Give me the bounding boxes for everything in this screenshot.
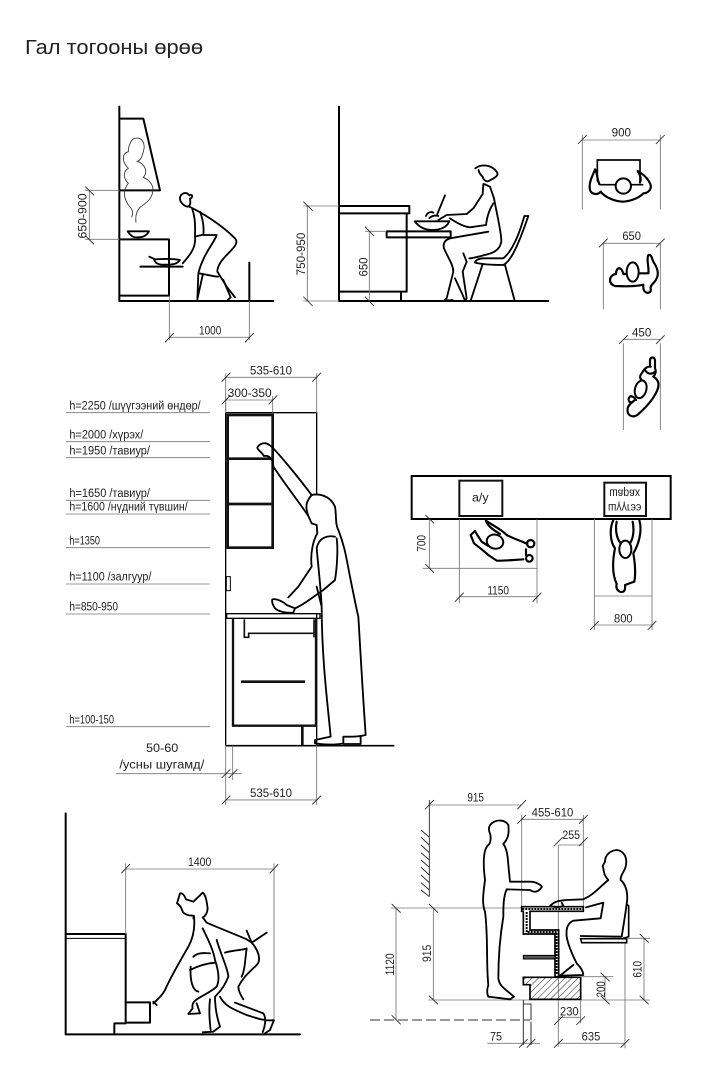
head xyxy=(475,165,498,181)
dimension 1000: 1000 xyxy=(199,323,221,337)
dish xyxy=(149,257,180,265)
counter lower line xyxy=(66,937,126,940)
dimension 535-610 bottom xyxy=(222,786,321,804)
cabinet, hood and floor xyxy=(119,107,273,301)
dashed drain xyxy=(523,1000,531,1045)
dimension 1120 xyxy=(383,904,401,1024)
dimension 200: 200 xyxy=(594,981,608,997)
seated person xyxy=(550,850,627,976)
dimension 1150 xyxy=(455,519,541,603)
dimension 915 top xyxy=(425,791,526,809)
height labels: h=1350 xyxy=(69,533,100,547)
head xyxy=(180,193,192,207)
dimension 650 xyxy=(356,227,387,306)
box oven: шарах xyxy=(609,486,641,500)
dimension 50-60 water line: 50-60 xyxy=(146,741,178,755)
dimension 800: 800 xyxy=(614,612,633,626)
dimension 915 left xyxy=(420,904,438,1004)
height labels: h=2250 /шүүгээний өндөр/ xyxy=(69,399,201,413)
chair xyxy=(471,216,528,301)
dimension 800 xyxy=(590,519,656,630)
panel: seated at counter side view xyxy=(294,107,548,306)
dimension 635 xyxy=(554,1029,629,1048)
panel: plan view postures xyxy=(578,126,665,430)
plan figure 650: 650 xyxy=(622,229,641,243)
plan figure at sink xyxy=(471,521,534,562)
wall hatching xyxy=(421,800,429,897)
dimension 50-60 water line xyxy=(116,741,317,805)
dimension 750-950 xyxy=(294,202,339,306)
wall, counter and floor xyxy=(339,107,548,301)
dimension 75: 75 xyxy=(490,1029,502,1043)
dimension 650-900 xyxy=(76,187,119,244)
dimension 75 xyxy=(487,1029,540,1048)
height labels: h=100-150 xyxy=(69,712,114,726)
standing person reaching xyxy=(257,443,366,745)
dimension 610 xyxy=(627,934,650,1004)
dimension 230: 230 xyxy=(560,1005,579,1019)
dimension 535-610 bottom: 535-610 xyxy=(250,786,292,800)
dimension 915 top: 915 xyxy=(467,791,484,805)
standing person xyxy=(483,821,542,999)
plan figure 450: 450 xyxy=(632,326,651,340)
plan figure at oven xyxy=(611,520,641,592)
dimension 1150: 1150 xyxy=(487,583,509,597)
dimension 1400: 1400 xyxy=(188,855,211,869)
dimension 300-350: 300-350 xyxy=(228,386,272,400)
dimension 255: 255 xyxy=(562,828,580,842)
wall, counter and floor xyxy=(66,813,300,1034)
dimension 750-950: 750-950 xyxy=(294,233,308,275)
dimension 610: 610 xyxy=(631,961,645,978)
plan figure 900: 900 xyxy=(612,126,631,140)
bowl on stove xyxy=(128,231,149,237)
dimension 455-610 xyxy=(517,806,588,824)
hatched base xyxy=(523,977,581,999)
woman holding dish xyxy=(149,193,236,300)
dimension 915 left: 915 xyxy=(420,945,434,962)
dimension 650-900: 650-900 xyxy=(76,193,90,238)
dimension 200 xyxy=(582,973,613,1004)
dimension 50-60 water line: /усны шугамд/ xyxy=(119,758,205,772)
panel: counter plan view xyxy=(412,476,671,630)
dimension 255 xyxy=(554,828,588,846)
dimension 700: 700 xyxy=(415,535,429,552)
dimension 300-350 xyxy=(222,386,277,413)
bowl and chopsticks xyxy=(415,195,449,230)
dimension 535-610 top: 535-610 xyxy=(250,364,292,378)
panel: bar counter section xyxy=(370,791,650,1048)
steam xyxy=(123,138,153,223)
bending person xyxy=(153,893,274,1033)
dimension 230 xyxy=(554,1000,585,1025)
height labels: h=1950 /тавиур/ xyxy=(69,443,150,457)
dimension 700 xyxy=(415,515,537,573)
dimension 1400 xyxy=(121,855,278,1020)
seat xyxy=(581,904,629,943)
height labels: h=1650 /тавиур/ xyxy=(69,486,150,500)
counter xyxy=(412,476,671,519)
panel: bending person at low drawer xyxy=(66,813,300,1034)
dimension 535-610 top xyxy=(222,364,321,413)
plan figure 450 xyxy=(619,326,665,430)
counter structure xyxy=(522,907,583,977)
body xyxy=(183,207,236,300)
height labels: h=850-950 xyxy=(69,599,118,613)
panel: hood and cooking side view xyxy=(76,107,273,342)
box oven xyxy=(604,483,646,516)
box a/y xyxy=(459,481,502,516)
guide lines xyxy=(391,815,650,1048)
plan figure 900 xyxy=(578,126,665,209)
dimension 455-610: 455-610 xyxy=(532,806,573,820)
dashed floor level xyxy=(370,1018,530,1021)
panel: tall cabinet height elevation xyxy=(66,364,394,805)
height labels xyxy=(69,399,201,726)
plan figure 650 xyxy=(599,229,665,309)
seated woman xyxy=(415,165,528,301)
box a/y: а/у xyxy=(472,490,490,504)
height labels: h=1600 /нүдний түвшин/ xyxy=(69,499,188,513)
height labels: h=1100 /залгуур/ xyxy=(69,570,152,584)
dimension 1120: 1120 xyxy=(383,953,397,975)
body xyxy=(438,184,501,301)
dimension 635: 635 xyxy=(582,1029,600,1043)
dimension 650: 650 xyxy=(356,257,370,276)
box oven: шүүгээ xyxy=(608,501,641,515)
dimension 1000 xyxy=(165,296,254,342)
tall cabinet xyxy=(226,413,394,746)
height labels: h=2000 /хүрэх/ xyxy=(69,427,144,441)
title: Гал тогооны өрөө xyxy=(25,37,203,59)
height level lines xyxy=(66,413,210,727)
